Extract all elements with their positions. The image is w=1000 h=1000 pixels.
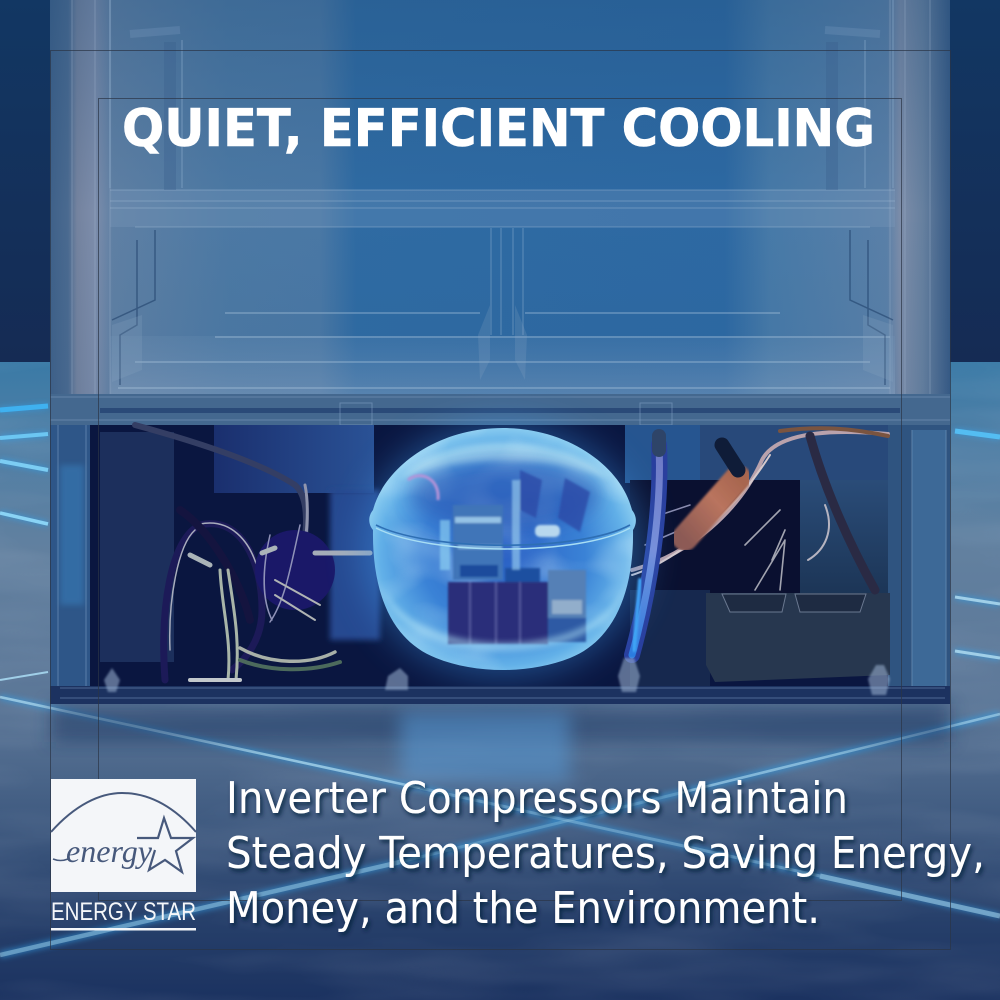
bottom lighter rim [385, 590, 622, 651]
swirling translucent texture [379, 430, 633, 670]
left dark panel [100, 432, 174, 662]
title: QUIET, EFFICIENT COOLING [122, 99, 875, 159]
left cabinet pillar [50, 425, 90, 695]
base rail and feet [50, 658, 950, 704]
upper dark internal shading [410, 460, 600, 530]
copper insulated tube [685, 445, 738, 538]
back wall centre right [625, 425, 715, 483]
internal rotor [453, 505, 503, 580]
logo arc [51, 793, 196, 832]
logo star [137, 818, 193, 872]
upper shelf [110, 190, 895, 227]
energy star logo [51, 779, 196, 930]
left door pillar [72, 0, 930, 410]
right wiring bundle [632, 428, 888, 590]
upper bin edges [110, 0, 893, 190]
lower cavity right [630, 590, 710, 686]
center divider [491, 228, 523, 335]
background: back wall [0, 0, 1000, 362]
shell seam [376, 525, 630, 545]
lower machine compartment [50, 425, 950, 695]
floor light streaks [0, 406, 1000, 955]
logo underline [51, 928, 196, 930]
frame rail between sections [50, 394, 950, 426]
description text [226, 773, 985, 934]
right cabinet pillar [888, 425, 950, 695]
control box [706, 593, 890, 682]
dark cavity right [630, 480, 805, 595]
back panel right [800, 480, 890, 595]
logo script word: energy [66, 833, 153, 869]
left wiring bundle [135, 425, 370, 680]
upper internal components [408, 470, 590, 570]
mid blue fill [330, 490, 380, 640]
background: reflective floor [0, 362, 1000, 1000]
refrigerator cabinet: upper transparent section [50, 0, 950, 425]
vertical suction pipe [632, 436, 659, 655]
description text: Inverter Compressors Maintain [226, 773, 848, 824]
upper shell highlight [400, 442, 610, 480]
compressor dome [365, 425, 640, 675]
logo caption: ENERGY STAR [51, 898, 196, 926]
description text: Money, and the Environment. [226, 883, 820, 934]
lower bin section [110, 230, 895, 394]
internal motor block [448, 568, 586, 644]
compressor glow [361, 422, 645, 678]
back wall left [214, 425, 374, 493]
floor reflection under fridge [50, 704, 950, 782]
